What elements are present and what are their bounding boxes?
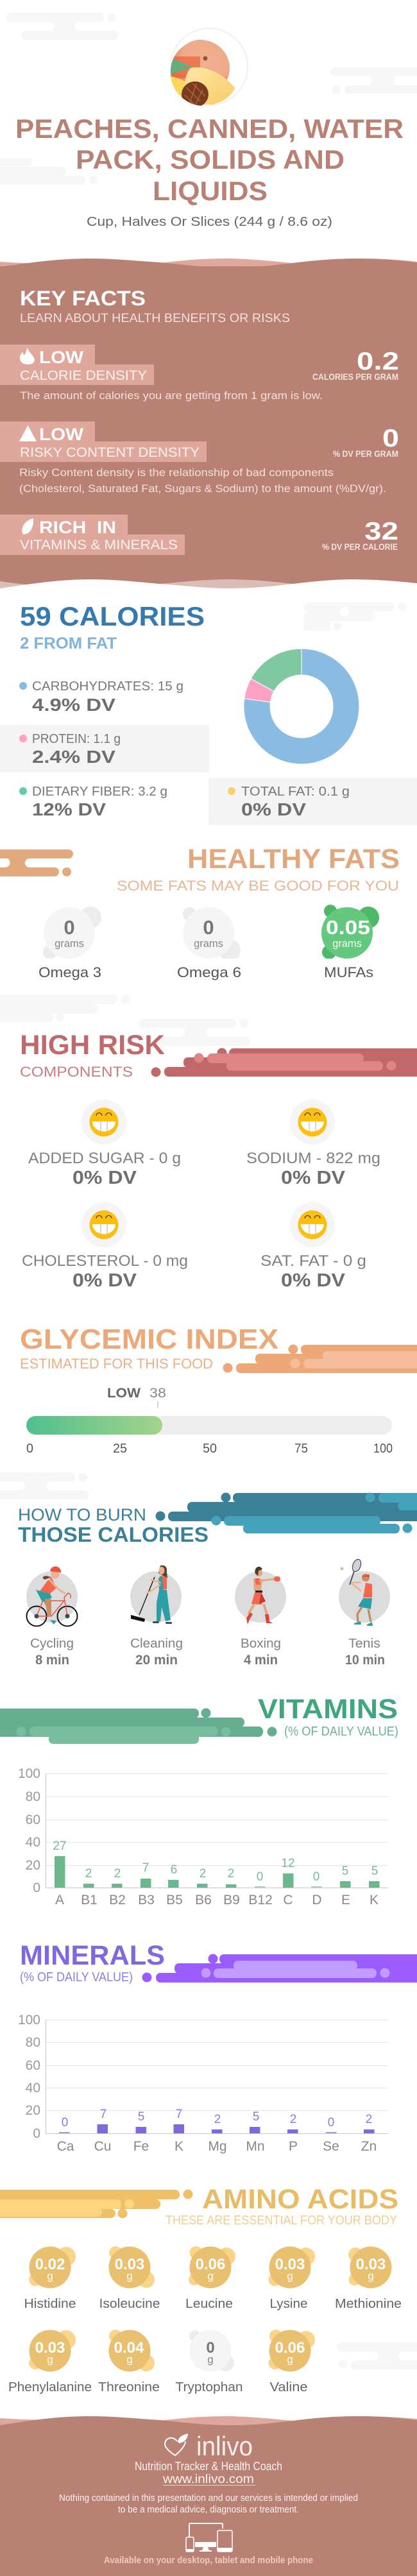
gauge scale labels (26, 1442, 393, 1456)
amino: phenylalanine (8, 2330, 92, 2394)
title: PACK, SOLIDS AND (76, 144, 345, 175)
footer tagline: Nutrition Tracker & Health Coach (135, 2460, 282, 2473)
activity labels: Tenis (348, 1636, 380, 1651)
footer website link: www.inlivo.com (162, 2473, 254, 2486)
healthy fats subheading: SOME FATS MAY BE GOOD FOR YOU (117, 878, 399, 894)
amino: threonine: g (126, 2353, 133, 2366)
amino: tryptophan: Tryptophan (176, 2380, 243, 2394)
fact: calorie density: The amount of calories you are getting from 1 gram is low. (20, 389, 323, 402)
bar chart: vitamins: C (283, 1893, 293, 1907)
bar chart: minerals: 20 (26, 2103, 40, 2118)
bar chart: vitamins: 5 (342, 1864, 348, 1878)
fat: omega 3: grams (55, 938, 84, 950)
amino: lysine (268, 2247, 315, 2311)
macro: carbohydrates: 4.9% DV (32, 695, 115, 715)
amino: methionine: 0.03 (356, 2256, 386, 2273)
activity labels: Cleaning (130, 1636, 183, 1651)
amino: histidine: Histidine (24, 2297, 76, 2311)
fact: risky content density: LOW (39, 425, 84, 444)
activity labels: 8 min (35, 1653, 69, 1668)
title: PEACHES, CANNED, WATER (15, 114, 404, 144)
amino: tryptophan (176, 2330, 243, 2394)
amino: histidine: g (47, 2270, 53, 2282)
bar chart: vitamins (18, 1766, 388, 1907)
amino: methionine: Methionine (335, 2297, 402, 2311)
glycemic subheading: ESTIMATED FOR THIS FOOD (20, 1356, 213, 1372)
amino: tryptophan: 0 (206, 2339, 215, 2357)
glycemic heading: GLYCEMIC INDEX (20, 1324, 278, 1355)
bar chart: vitamins: 27 (53, 1839, 67, 1853)
risk: added sugar: 0% DV (72, 1168, 137, 1188)
panel: calories (0, 601, 417, 825)
burn decorative band (155, 1492, 417, 1533)
fact: risky content density (0, 422, 399, 495)
fact: rich in vitamins and minerals: % DV PER CALORIE (322, 542, 398, 552)
disclaimer (59, 2493, 358, 2515)
bar chart: minerals: Cu (94, 2139, 111, 2154)
activity labels (30, 1636, 385, 1668)
background cloud beside amino acids (337, 2342, 417, 2369)
bar chart: vitamins: 5 (371, 1864, 378, 1878)
burn heading line one: HOW TO BURN (18, 1505, 146, 1524)
activity labels: Boxing (241, 1636, 281, 1651)
bar chart: minerals: Zn (361, 2139, 377, 2154)
food photo: peach (171, 28, 248, 107)
fat: omega 3 (38, 907, 101, 980)
activity labels: Cycling (30, 1636, 74, 1651)
bar chart: vitamins: B3 (138, 1893, 155, 1907)
macro: carbohydrates: CARBOHYDRATES: 15 g (32, 679, 183, 694)
gauge scale labels: 75 (294, 1442, 308, 1456)
fact: calorie density: CALORIE DENSITY (20, 368, 147, 383)
fact: calorie density: CALORIES PER GRAM (312, 372, 398, 382)
burn heading line two: THOSE CALORIES (18, 1523, 208, 1546)
title: LIQUIDS (153, 176, 268, 206)
bar chart: vitamins: 80 (26, 1789, 40, 1804)
minerals heading: MINERALS (20, 1940, 165, 1971)
fat: omega 6: grams (194, 938, 223, 950)
macro: dietary fiber (19, 785, 167, 819)
bar chart: vitamins: B12 (248, 1893, 273, 1907)
risk: sodium (246, 1100, 380, 1188)
bar chart: minerals: 40 (26, 2081, 40, 2095)
amino: isoleucine: g (126, 2270, 133, 2282)
fact: rich in vitamins and minerals (0, 515, 398, 555)
minerals subheading: (% OF DAILY VALUE) (20, 1970, 133, 1984)
amino heading: AMINO ACIDS (202, 2184, 398, 2215)
risk: saturated fat (260, 1202, 366, 1291)
disclaimer: Nothing contained in this presentation and our services is intended or implied (59, 2493, 358, 2503)
bar chart: minerals: 0 (33, 2126, 40, 2141)
bar chart: vitamins: 2 (228, 1867, 234, 1881)
amino: lysine: 0.03 (275, 2256, 305, 2273)
risk: cholesterol: 0% DV (72, 1270, 137, 1291)
activity labels: 4 min (244, 1653, 278, 1668)
bar chart: vitamins: 100 (18, 1766, 40, 1781)
key facts heading: KEY FACTS (20, 287, 146, 310)
panel: amino acids (0, 2184, 402, 2394)
amino: valine: g (287, 2353, 293, 2366)
risk: cholesterol (22, 1202, 188, 1291)
bar chart: minerals: Fe (133, 2139, 149, 2154)
activity: tennis (339, 1558, 390, 1626)
background clouds above high risk (0, 994, 250, 1046)
bar chart: minerals: 2 (214, 2113, 221, 2126)
key facts subheading: LEARN ABOUT HEALTH BENEFITS OR RISKS (20, 311, 290, 325)
header background clouds (0, 13, 417, 185)
amino: valine: 0.06 (275, 2339, 305, 2357)
bar chart: minerals: 7 (176, 2108, 182, 2121)
fat: omega 3: Omega 3 (38, 964, 101, 980)
amino: valine (268, 2330, 315, 2394)
bar chart: vitamins: B5 (166, 1893, 183, 1907)
disclaimer: to be a medical advice, diagnosis or treatment. (118, 2504, 299, 2515)
panel: vitamins (0, 1694, 398, 1907)
activity: cleaning (130, 1565, 182, 1624)
bar chart: vitamins: 2 (114, 1867, 121, 1881)
amino: valine: Valine (269, 2380, 308, 2394)
panel: how to burn those calories (18, 1492, 417, 1668)
panel: healthy fats (0, 844, 400, 980)
fat: omega 6: 0 (203, 916, 214, 939)
bar chart: minerals: 2 (290, 2113, 296, 2126)
fat: MUFAs: 0.05 (326, 916, 370, 939)
fat: MUFAs: MUFAs (324, 964, 373, 980)
glycemic gauge bar (26, 1416, 392, 1435)
macro: total fat: TOTAL FAT: 0.1 g (241, 785, 350, 799)
bar chart: minerals: Se (323, 2139, 339, 2154)
bar chart: vitamins: E (341, 1893, 350, 1907)
gauge scale labels: 25 (113, 1442, 127, 1456)
bar chart: vitamins: 40 (26, 1835, 40, 1850)
logo: inlivo: inlivo (196, 2431, 253, 2461)
icon: warning triangle (19, 425, 37, 441)
activity labels: 20 min (135, 1653, 178, 1668)
risk: cholesterol: CHOLESTEROL - 0 mg (22, 1252, 188, 1270)
bar chart: vitamins: B9 (223, 1893, 240, 1907)
risk: added sugar: ADDED SUGAR - 0 g (28, 1150, 181, 1167)
fact: calorie density: 0.2 (357, 348, 399, 375)
bar chart: vitamins: 0 (33, 1881, 40, 1895)
bar chart: vitamins: A (55, 1893, 64, 1907)
healthy fats decorative band (0, 849, 73, 876)
risk: saturated fat: SAT. FAT - 0 g (260, 1252, 366, 1270)
donut chart (244, 649, 359, 764)
fact: risky content density: (Cholesterol, Saturated Fat, Sugars & Sodium) to the amount (%DV/gr). (19, 482, 386, 495)
fact: risky content density: Risky Content density is the relationship of bad components (19, 466, 334, 479)
fact: rich in vitamins and minerals: 32 (364, 518, 398, 545)
bar chart: vitamins: 0 (257, 1870, 263, 1884)
activity: cycling (26, 1566, 78, 1626)
fat: omega 3: 0 (64, 916, 75, 939)
amino: isoleucine: Isoleucine (99, 2297, 160, 2311)
title (15, 114, 404, 206)
bar chart: minerals: 100 (18, 2013, 40, 2027)
bar chart: vitamins: 2 (200, 1867, 206, 1881)
bar chart: vitamins: 20 (26, 1858, 40, 1873)
bar chart: vitamins: K (370, 1893, 379, 1907)
fact: calorie density (0, 345, 399, 402)
amino: threonine: 0.04 (114, 2339, 144, 2357)
bar chart: vitamins: B6 (195, 1893, 212, 1907)
gauge scale labels: 50 (203, 1442, 217, 1456)
bar chart: minerals: Mn (246, 2139, 265, 2154)
amino: leucine (185, 2246, 235, 2311)
amino: threonine: Threonine (98, 2380, 160, 2394)
amino: phenylalanine: Phenylalanine (8, 2380, 92, 2394)
vitamins heading: VITAMINS (258, 1694, 398, 1725)
fat: omega 6: Omega 6 (177, 964, 241, 980)
bar chart: vitamins: B1 (81, 1893, 98, 1907)
icon: leaf (22, 518, 33, 534)
amino: methionine: g (368, 2270, 374, 2282)
macro: total fat (208, 778, 417, 825)
bar chart: minerals: 60 (26, 2058, 40, 2073)
fact: rich in vitamins and minerals: VITAMINS & MINERALS (20, 538, 178, 552)
bar chart: minerals: K (174, 2139, 183, 2154)
bar chart: minerals (18, 2013, 388, 2154)
panel: key facts (0, 259, 417, 588)
panel: footer (0, 2416, 417, 2576)
high risk heading: HIGH RISK (20, 1030, 165, 1061)
bar chart: vitamins: 0 (313, 1870, 319, 1884)
amino: methionine (335, 2247, 402, 2311)
amino: threonine (98, 2330, 160, 2394)
activity: boxing (235, 1567, 286, 1625)
bar chart: minerals: 2 (366, 2113, 372, 2126)
panel: glycemic index (20, 1324, 417, 1456)
bar chart: vitamins: D (312, 1893, 322, 1907)
risk: saturated fat: 0% DV (281, 1270, 346, 1291)
logo: inlivo (165, 2431, 253, 2461)
amino: lysine: Lysine (269, 2297, 308, 2311)
minerals decorative band (142, 1954, 417, 1983)
activity labels: 10 min (345, 1653, 385, 1668)
amino: lysine: g (287, 2270, 293, 2282)
gauge scale labels: 0 (26, 1442, 33, 1456)
macro: dietary fiber: 12% DV (32, 799, 106, 819)
risk: sodium: 0% DV (281, 1168, 346, 1188)
fat: MUFAs (321, 905, 379, 980)
bar chart: vitamins: 6 (171, 1863, 177, 1877)
icon: desktop, tablet and phone (186, 2523, 232, 2552)
bar chart: vitamins: 12 (281, 1857, 295, 1870)
fact: rich in vitamins and minerals: RICH IN (39, 518, 116, 537)
serving size subtitle: Cup, Halves Or Slices (244 g / 8.6 oz) (87, 214, 332, 229)
amino: histidine: 0.02 (35, 2256, 65, 2273)
fat: omega 6 (177, 907, 241, 980)
bar chart: minerals: 5 (253, 2110, 259, 2124)
bar chart: minerals: 7 (100, 2108, 106, 2121)
fact: risky content density: RISKY CONTENT DENSITY (20, 445, 200, 460)
amino: histidine (24, 2247, 76, 2311)
amino decorative band (0, 2189, 192, 2219)
macro: carbohydrates (19, 679, 183, 715)
fat: MUFAs: grams (332, 938, 362, 950)
high risk decorative band (151, 1048, 417, 1077)
icon: flame (20, 348, 35, 364)
fact: calorie density: LOW (39, 348, 84, 367)
bar chart: minerals: 0 (62, 2116, 68, 2129)
panel: high risk components (20, 1030, 417, 1291)
high risk subheading: COMPONENTS (20, 1064, 133, 1080)
macro: protein (0, 725, 209, 772)
calories from fat: 2 FROM FAT (20, 635, 117, 653)
amino: leucine: g (207, 2270, 214, 2282)
healthy fats heading: HEALTHY FATS (187, 844, 400, 874)
vitamins decorative band (0, 1708, 277, 1744)
macro: total fat: 0% DV (241, 799, 306, 819)
amino: phenylalanine: 0.03 (35, 2339, 65, 2357)
gauge scale labels: 100 (373, 1442, 393, 1456)
amino: tryptophan: g (207, 2353, 214, 2366)
glycemic decorative band (223, 1345, 417, 1373)
panel: minerals (18, 1940, 417, 2154)
bar chart: minerals: P (289, 2139, 298, 2154)
macro: dietary fiber: DIETARY FIBER: 3.2 g (32, 785, 167, 799)
bar chart: minerals: Mg (208, 2139, 227, 2154)
bar chart: vitamins: 7 (142, 1861, 149, 1875)
bar chart: minerals: 0 (328, 2116, 334, 2129)
glycemic value label: LOW (107, 1386, 140, 1401)
glycemic value label (107, 1386, 166, 1408)
bar chart: minerals: Ca (57, 2139, 74, 2154)
glycemic value label: 38 (149, 1386, 166, 1401)
amino: phenylalanine: g (47, 2353, 53, 2366)
fact: risky content density: 0 (382, 425, 399, 452)
amino subheading: THESE ARE ESSENTIAL FOR YOUR BODY (166, 2213, 397, 2228)
macro: protein: 2.4% DV (32, 747, 115, 767)
risk: added sugar (28, 1100, 181, 1188)
amino: leucine: Leucine (185, 2297, 233, 2311)
bar chart: minerals: 80 (26, 2035, 40, 2050)
amino: leucine: 0.06 (196, 2256, 225, 2273)
vitamins subheading: (% OF DAILY VALUE) (284, 1725, 398, 1739)
fact: risky content density: % DV PER GRAM (333, 449, 398, 459)
amino: isoleucine: 0.03 (115, 2256, 144, 2273)
risk: sodium: SODIUM - 822 mg (246, 1150, 380, 1167)
availability note: Available on your desktop, tablet and mobile phone (104, 2555, 313, 2566)
bar chart: vitamins: B2 (109, 1893, 126, 1907)
background cloud above burn section (0, 1472, 89, 1499)
amino: isoleucine (99, 2246, 160, 2311)
macro: protein: PROTEIN: 1.1 g (32, 732, 121, 746)
bar chart: minerals: 5 (138, 2110, 144, 2124)
bar chart: vitamins: 2 (85, 1867, 92, 1881)
bar chart: vitamins: 60 (26, 1813, 40, 1827)
calories heading: 59 CALORIES (20, 601, 205, 631)
